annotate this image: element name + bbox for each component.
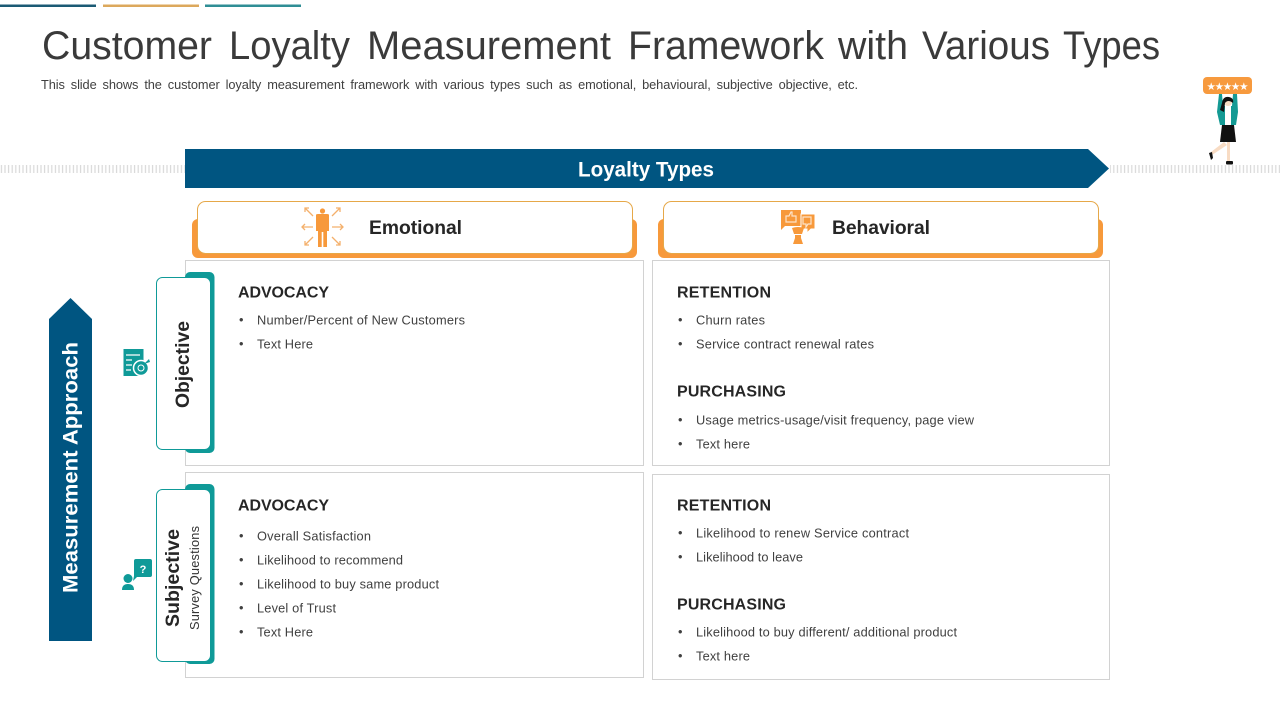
panel: emotional subjective: Likelihood to buy same product xyxy=(257,576,439,592)
panel: behavioral objective: Service contract renewal rates xyxy=(696,336,874,352)
title: Various xyxy=(922,24,1050,68)
icon: thumbs feedback xyxy=(781,210,815,244)
icon: woman holding five star rating xyxy=(1203,77,1252,164)
panel: behavioral objective: RETENTION xyxy=(677,284,771,302)
header card: emotional xyxy=(192,202,637,258)
panel: behavioral subjective: • xyxy=(678,525,682,540)
panel: emotional objective: ADVOCACY xyxy=(238,284,329,302)
tab: subjective xyxy=(156,484,214,664)
panel: emotional subjective: • xyxy=(239,576,243,591)
panel: emotional subjective: Overall Satisfaction xyxy=(257,528,371,544)
title: Customer xyxy=(42,24,212,68)
title: Measurement xyxy=(367,24,611,68)
icon: objective checklist target xyxy=(124,349,150,376)
panel: emotional subjective: Level of Trust xyxy=(257,600,336,616)
panel: emotional objective: Text Here xyxy=(257,336,313,352)
header card: behavioral xyxy=(658,202,1103,258)
panel: behavioral objective: Usage metrics-usage/visit frequency, page view xyxy=(696,412,975,428)
panel: emotional objective: • xyxy=(239,312,243,327)
panel: behavioral objective: • xyxy=(678,412,682,427)
panel: behavioral objective: PURCHASING xyxy=(677,384,786,400)
panel: emotional subjective xyxy=(186,472,644,678)
title xyxy=(42,24,1160,68)
title: Types xyxy=(1063,24,1160,68)
panel: emotional subjective: • xyxy=(239,528,243,543)
dotted lines xyxy=(0,165,1280,173)
panel: behavioral objective: • xyxy=(678,336,682,351)
panel: behavioral subjective: RETENTION xyxy=(677,498,771,514)
banner arrow: loyalty types: Loyalty Types xyxy=(578,158,714,182)
panel: emotional subjective: • xyxy=(239,624,243,639)
banner arrow: loyalty types xyxy=(185,149,1109,188)
panel: behavioral objective: • xyxy=(678,312,682,327)
top accent bars xyxy=(0,4,301,7)
header card: emotional: Emotional xyxy=(369,218,462,239)
title: with xyxy=(837,24,908,68)
panel: behavioral subjective: • xyxy=(678,648,682,663)
panel: behavioral subjective: • xyxy=(678,624,682,639)
icon: subjective person question: ? xyxy=(140,564,147,576)
panel: emotional subjective: • xyxy=(239,552,243,567)
panel: emotional subjective: Text Here xyxy=(257,624,313,640)
panel: behavioral subjective: Likelihood to buy different/ additional product xyxy=(696,624,957,640)
panel: behavioral objective: Churn rates xyxy=(696,312,765,328)
tab: objective: Objective xyxy=(173,321,194,408)
icon: person with arrows xyxy=(302,208,343,247)
panel: behavioral subjective: PURCHASING xyxy=(677,596,786,614)
panel: behavioral subjective xyxy=(652,474,1110,680)
vertical arrow: measurement approach: Measurement Approach xyxy=(58,342,82,593)
tab: objective xyxy=(156,272,214,453)
tab: subjective: Survey Questions xyxy=(187,526,202,630)
panel: emotional objective xyxy=(186,260,644,466)
panel: behavioral objective: • xyxy=(678,436,682,451)
icon: woman holding five star rating: ★★★★★ xyxy=(1206,81,1248,93)
icon: subjective person question xyxy=(122,559,152,590)
title: Framework xyxy=(628,24,825,68)
panel: emotional objective: • xyxy=(239,336,243,351)
panel: emotional objective: Number/Percent of New Customers xyxy=(257,312,465,328)
panel: behavioral subjective: Likelihood to renew Service contract xyxy=(696,526,909,540)
panel: emotional subjective: Likelihood to recommend xyxy=(257,552,403,568)
panel: behavioral objective: Text here xyxy=(696,436,750,452)
panel: emotional subjective: • xyxy=(239,600,243,615)
panel: behavioral subjective: • xyxy=(678,549,682,564)
panel: emotional subjective: ADVOCACY xyxy=(238,498,329,514)
vertical arrow: measurement approach xyxy=(49,298,92,641)
title: Loyalty xyxy=(229,24,350,68)
subtitle: This slide shows the customer loyalty measurement framework with various types such as emotional, behavioural, subjective objective, etc. xyxy=(41,77,858,92)
panel: behavioral objective xyxy=(652,260,1110,466)
header card: behavioral: Behavioral xyxy=(832,218,930,239)
tab: subjective: Subjective xyxy=(162,529,184,627)
panel: behavioral subjective: Likelihood to leave xyxy=(696,550,803,564)
panel: behavioral subjective: Text here xyxy=(696,648,750,664)
